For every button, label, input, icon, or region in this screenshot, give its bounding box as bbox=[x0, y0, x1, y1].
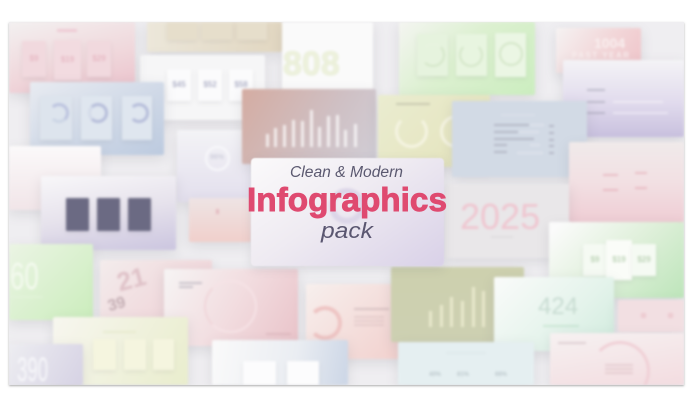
panel: purple list bbox=[563, 60, 684, 137]
panel: teal stats: 40% bbox=[429, 372, 441, 378]
panel: olive bar chart bbox=[391, 267, 524, 342]
panel: pink number bbox=[556, 28, 641, 73]
panel: green 60: 60 bbox=[10, 256, 39, 298]
panel: pink price cards: $29 bbox=[92, 54, 106, 63]
panel: 2025 bbox=[445, 184, 569, 258]
panel: pink number: PAST YEAR bbox=[572, 51, 631, 60]
bars bbox=[264, 109, 358, 148]
panel: pink number: 1004 bbox=[594, 35, 625, 51]
panel: white price cards: $58 bbox=[234, 80, 248, 89]
panel: purple 390 bbox=[9, 344, 83, 385]
panel: green price cards bbox=[549, 222, 684, 298]
panel: pink arc bbox=[550, 333, 684, 385]
panel: pink 3d numbers: 21 bbox=[113, 261, 149, 297]
green donuts bbox=[421, 43, 445, 67]
faint donut behind title bbox=[329, 188, 365, 224]
panel: 2025: 2025 bbox=[460, 196, 540, 237]
yellow donut bbox=[395, 115, 428, 148]
panel: white price cards: $45 bbox=[172, 80, 186, 89]
donut three bbox=[129, 103, 149, 123]
second yellow donut bbox=[440, 115, 473, 148]
panel: purple dark cards bbox=[41, 176, 176, 250]
panel: white 808: 808 bbox=[283, 45, 340, 83]
panel: salmon text bbox=[306, 284, 420, 359]
donut one bbox=[49, 103, 69, 123]
panel: lavender percentage: 96% bbox=[210, 154, 224, 161]
panel: yellow-green cards bbox=[53, 317, 188, 385]
panel: white 808 bbox=[282, 22, 373, 89]
panel: lavender percentage bbox=[177, 130, 251, 202]
panel: yellow donuts bbox=[378, 95, 490, 167]
panel: white-green 424 bbox=[494, 277, 614, 351]
panel: blue-white cards bbox=[212, 340, 348, 385]
panel: tan cards bbox=[147, 22, 282, 52]
title: Infographics bbox=[247, 181, 447, 218]
panel: white left bbox=[9, 146, 101, 210]
panel: teal stats bbox=[398, 342, 534, 385]
panel: pink circle bbox=[164, 269, 298, 346]
panel: small pink bbox=[189, 198, 251, 242]
subtitle: Clean & Modern bbox=[290, 164, 403, 181]
pack label: pack bbox=[320, 218, 374, 243]
panel: green 60 bbox=[9, 244, 93, 320]
donut two bbox=[88, 103, 108, 123]
panel: pink price cards bbox=[9, 22, 135, 93]
panel: pink 3d numbers bbox=[100, 260, 212, 320]
panel: pink price cards: $19 bbox=[61, 55, 74, 64]
panel: teal stats: 66% bbox=[495, 372, 507, 378]
panel: pink 3d numbers: 39 bbox=[106, 294, 128, 315]
panel: green price cards: $9 bbox=[591, 255, 599, 264]
panel: green price cards: $29 bbox=[637, 255, 651, 264]
panel: white-green 424: 424 bbox=[538, 293, 578, 320]
panel: white price cards: $52 bbox=[203, 80, 217, 89]
panel: pink price cards: $9 bbox=[30, 54, 38, 63]
circle gauge bbox=[204, 280, 257, 333]
panel: green price cards: $19 bbox=[612, 255, 626, 264]
panel: green donut cards bbox=[399, 22, 535, 95]
panel: blue donut cards bbox=[30, 82, 164, 155]
panel: blue-gray table bbox=[452, 101, 587, 177]
panel: brown bar chart bbox=[242, 89, 376, 164]
panel: central title card bbox=[251, 158, 444, 266]
panel: teal stats: 81% bbox=[457, 372, 469, 378]
panel: small pink icons bbox=[618, 300, 684, 332]
panel: white price cards bbox=[140, 55, 265, 120]
panel: pink right bbox=[569, 142, 684, 222]
